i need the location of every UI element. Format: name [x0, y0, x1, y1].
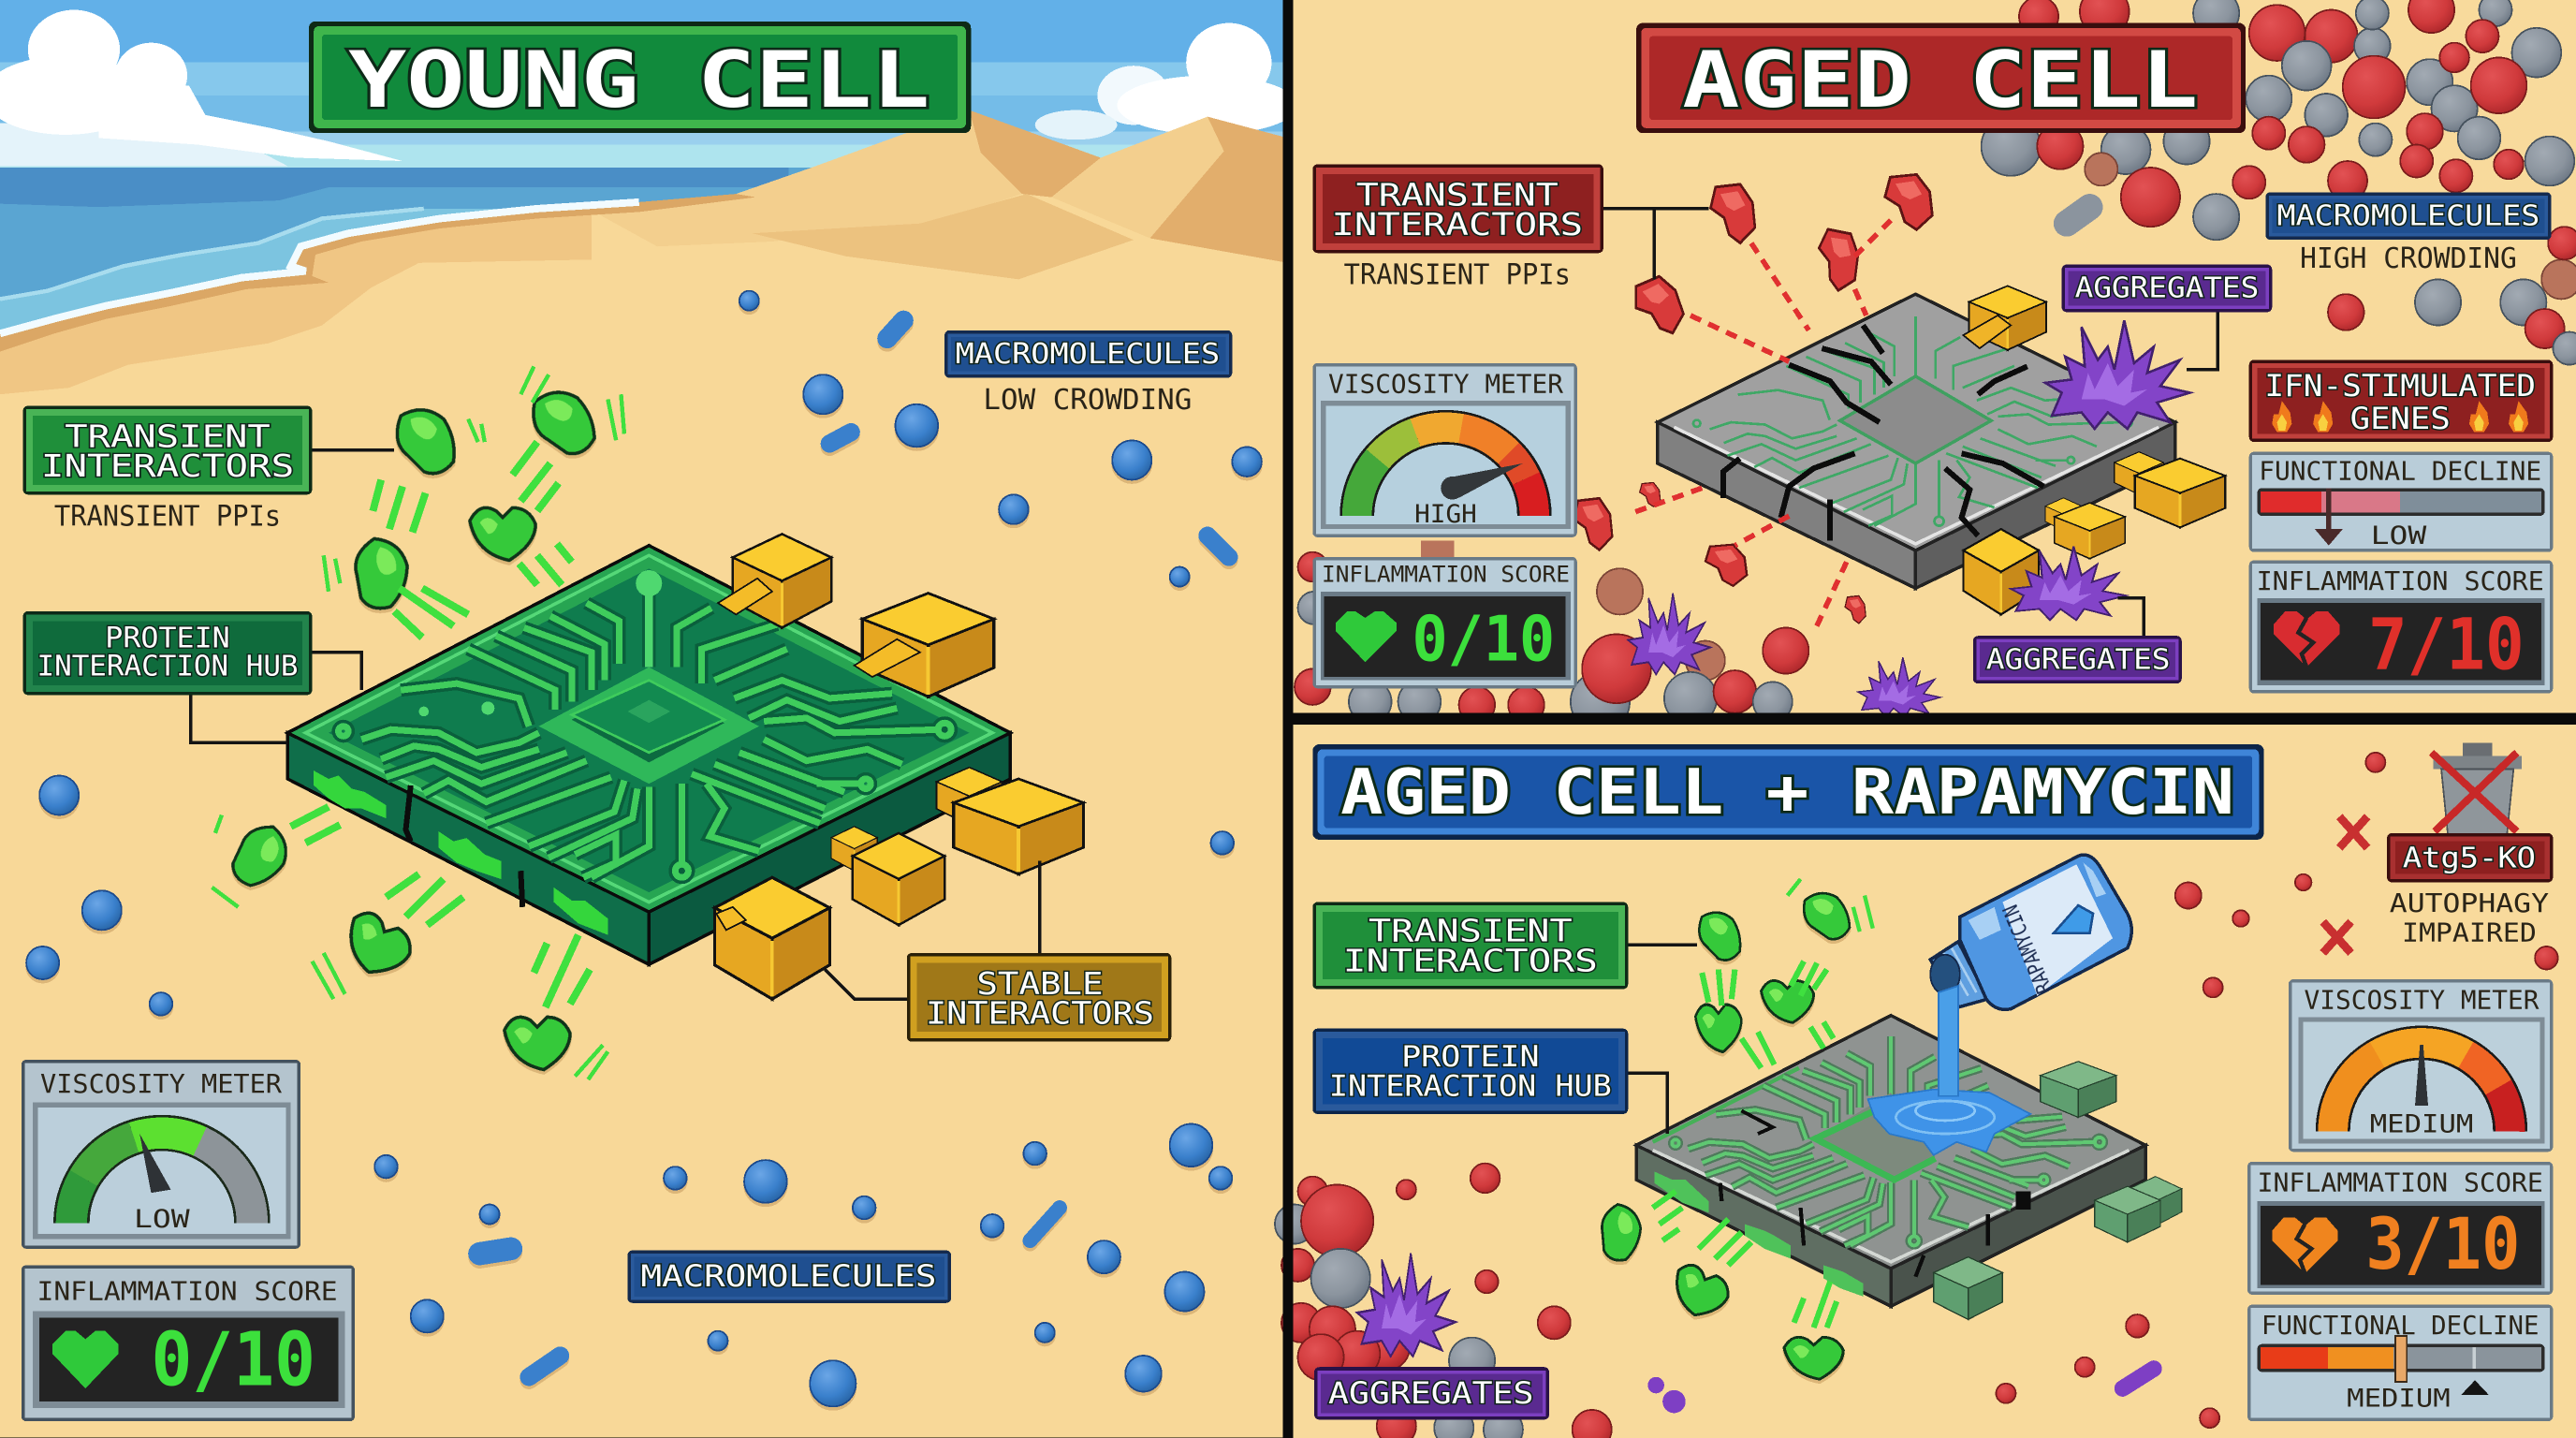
connector lines — [1627, 945, 1697, 1134]
label: macromolecules aged: MACROMOLECULES — [2277, 199, 2539, 232]
label: transient interactors — [1312, 902, 1628, 990]
restored chip — [1815, 1093, 1936, 1181]
label: transient interactors: INTERACTORS — [1343, 942, 1598, 978]
rapamycin bottle — [1930, 855, 2131, 1009]
panel: young cell — [0, 0, 1298, 1438]
label: IFN-stimulated genes: IFN-STIMULATED — [2264, 370, 2536, 404]
progress bar — [2258, 1336, 2545, 1382]
panel: inflammation score 0/10 young — [22, 1265, 355, 1421]
label: aggregates top — [2062, 265, 2272, 312]
background: sky — [0, 0, 1288, 181]
panel: viscosity meter high — [1312, 363, 1577, 537]
panel: viscosity meter high: HIGH — [1414, 501, 1477, 529]
panel: viscosity meter low: VISCOSITY METER — [40, 1070, 283, 1099]
connector lines — [1602, 209, 2217, 636]
background: sand and dunes — [0, 110, 1288, 1438]
label: stable interactors: STABLE — [976, 965, 1104, 1002]
label: transient interactors aged — [1312, 165, 1603, 253]
icons: red x marks — [2323, 816, 2367, 953]
panel: aged cell — [1288, 0, 2576, 731]
connector lines — [191, 450, 1040, 999]
needle — [139, 1134, 171, 1193]
needle — [1441, 463, 1523, 500]
label: stable interactors: INTERACTORS — [926, 994, 1154, 1031]
circuit traces — [339, 579, 951, 877]
caption: low crowding: LOW CROWDING — [983, 384, 1192, 417]
motion lines — [1653, 879, 1873, 1328]
stable interactors: yellow blocks — [714, 534, 1083, 999]
panel: functional decline medium — [2247, 1305, 2553, 1421]
label: transient interactors: TRANSIENT — [65, 418, 271, 454]
label: protein interaction hub — [23, 611, 312, 695]
caption: autophagy impaired — [2390, 889, 2549, 948]
aggregates: purple — [1357, 1254, 2154, 1413]
cracks — [1723, 326, 2043, 540]
label: macromolecules bottom: MACROMOLECULES — [640, 1260, 936, 1294]
central chip — [539, 668, 759, 784]
bottle label text: RAPAMYCIN — [1999, 902, 2057, 996]
label: protein interaction hub: INTERACTION HUB — [1329, 1070, 1612, 1104]
panel: functional decline low: LOW — [2371, 522, 2426, 550]
macromolecules: sparse blue — [26, 291, 1262, 1406]
panel: viscosity meter low — [22, 1060, 300, 1249]
label: IFN-stimulated genes — [2249, 360, 2553, 442]
background: foam line — [0, 202, 639, 333]
background: rapamycin sand — [1288, 718, 2576, 1438]
macromolecules crowd — [1275, 753, 2558, 1438]
panel: inflammation score 3/10: INFLAMMATION SCORE — [2258, 1168, 2543, 1197]
label: protein interaction hub: INTERACTION HUB — [37, 650, 299, 682]
faded chip — [1840, 376, 1991, 463]
triangle marker — [2461, 1380, 2489, 1395]
label: transient interactors aged: INTERACTORS — [1332, 206, 1583, 242]
macromolecules crowd: top right — [1982, 0, 2576, 365]
label: aggregates bottom: AGGREGATES — [1986, 643, 2170, 676]
label: aggregates top: AGGREGATES — [2075, 272, 2259, 305]
gauge — [1357, 427, 1534, 516]
panel: functional decline low: FUNCTIONAL DECLINE — [2259, 457, 2541, 486]
connector pegs — [716, 579, 920, 930]
label: aggregates: AGGREGATES — [1328, 1377, 1533, 1411]
panel: inflammation score 0/10 young: 0/10 — [151, 1317, 315, 1403]
label: stable interactors — [907, 953, 1171, 1042]
dividers — [1283, 0, 2576, 1438]
icon: green heart — [52, 1331, 118, 1388]
panel: inflammation score 0/10 aged: 0/10 — [1412, 603, 1555, 676]
caption: transient PPIs aged: TRANSIENT PPIs — [1344, 259, 1571, 292]
panel: viscosity meter medium — [2289, 979, 2553, 1152]
label: protein interaction hub: PROTEIN — [105, 623, 230, 655]
label: Atg5-KO — [2387, 833, 2553, 882]
title: aged cell — [1636, 23, 2246, 133]
background: aged sand — [1288, 0, 2576, 718]
label: transient interactors — [23, 406, 312, 494]
panel: functional decline medium: MEDIUM — [2347, 1385, 2451, 1413]
transient interactors: green blobs — [1588, 889, 1852, 1379]
caption: high crowding: HIGH CROWDING — [2300, 242, 2517, 275]
label: aggregates — [1314, 1367, 1549, 1419]
panel: inflammation score 3/10 — [2247, 1162, 2553, 1295]
title: aged cell + rapamycin — [1312, 744, 2264, 840]
top via and bus — [419, 570, 662, 716]
icon: mending orange heart — [2272, 1218, 2338, 1273]
label: protein interaction hub — [1312, 1029, 1628, 1114]
label: IFN-stimulated genes: GENES — [2350, 403, 2451, 436]
hub board: recovering — [1636, 1016, 2145, 1306]
stable interactors: green-grey blocks — [1934, 1062, 2182, 1319]
panel: inflammation score 3/10: 3/10 — [2365, 1203, 2520, 1285]
caption: autophagy impaired: IMPAIRED — [2402, 919, 2537, 948]
motion lines — [212, 366, 624, 1079]
faded traces — [1693, 316, 2132, 526]
macromolecules crowd: bottom left — [1295, 540, 1808, 731]
panel: viscosity meter low: LOW — [134, 1206, 190, 1234]
label: macromolecules aged — [2265, 192, 2552, 240]
broken interaction dashes — [1633, 220, 1891, 633]
title: aged cell + rapamycin: AGED CELL + RAPAMYCIN — [1340, 756, 2234, 829]
side connectors — [1654, 1171, 1863, 1297]
label: transient interactors aged: TRANSIENT — [1356, 176, 1559, 213]
icon: crossed-out trash bin — [2432, 742, 2522, 835]
icon: green heart — [1336, 611, 1397, 662]
label: macromolecules low crowding: MACROMOLECULES — [956, 338, 1220, 371]
title: young cell: YOUNG CELL — [348, 36, 929, 125]
panel: functional decline low — [2249, 452, 2553, 552]
label: Atg5-KO: Atg5-KO — [2403, 843, 2536, 875]
label: transient interactors: INTERACTORS — [41, 448, 294, 484]
label: aggregates bottom — [1973, 636, 2182, 683]
panel: viscosity meter medium: VISCOSITY METER — [2305, 987, 2539, 1016]
caption: autophagy impaired: AUTOPHAGY — [2390, 889, 2549, 918]
side connectors — [314, 770, 607, 935]
panel: viscosity meter high: VISCOSITY METER — [1328, 370, 1564, 399]
progress bar — [2258, 488, 2545, 516]
panel: inflammation score 7/10 — [2249, 560, 2553, 694]
needle — [2415, 1045, 2428, 1106]
caption: transient PPIs: TRANSIENT PPIs — [54, 501, 281, 534]
label: transient interactors: TRANSIENT — [1368, 913, 1573, 949]
icon: broken red heart — [2274, 611, 2339, 668]
panel: viscosity meter medium: MEDIUM — [2370, 1110, 2473, 1138]
poured stream and puddle — [1868, 986, 2030, 1155]
aggregates: purple — [1628, 320, 2190, 717]
protein interaction hub board — [287, 546, 1010, 964]
icons: flames — [2272, 401, 2528, 433]
transient interactors: red fragments — [1573, 174, 1932, 624]
panel: inflammation score 0/10 young: INFLAMMATION SCORE — [37, 1277, 338, 1306]
label: macromolecules low crowding — [944, 330, 1232, 378]
arrow — [2327, 488, 2330, 536]
gauge — [2333, 1043, 2510, 1132]
title: aged cell: AGED CELL — [1682, 36, 2198, 125]
title: young cell — [309, 22, 971, 133]
gauge — [71, 1133, 252, 1224]
background: clouds — [0, 10, 1298, 166]
panel: inflammation score 0/10 aged — [1312, 557, 1577, 688]
panel: inflammation score 7/10: INFLAMMATION SCORE — [2257, 567, 2544, 596]
panel: inflammation score 0/10 aged: INFLAMMATION SCORE — [1322, 561, 1570, 587]
cracks — [1720, 1110, 2030, 1277]
label: protein interaction hub: PROTEIN — [1401, 1040, 1540, 1074]
stable interactors: yellow blocks aged — [1963, 286, 2225, 614]
hub board: cracked grey — [1658, 294, 2175, 588]
label: macromolecules bottom — [627, 1251, 951, 1303]
panel: functional decline medium: FUNCTIONAL DECLINE — [2261, 1312, 2539, 1341]
panel: inflammation score 7/10: 7/10 — [2368, 603, 2525, 685]
transient interactors: green blobs — [223, 387, 597, 1070]
icon: droplet — [2054, 905, 2093, 933]
background: sea — [0, 168, 812, 333]
panel: aged cell plus rapamycin — [1275, 718, 2576, 1438]
restored traces — [1672, 1036, 2104, 1245]
